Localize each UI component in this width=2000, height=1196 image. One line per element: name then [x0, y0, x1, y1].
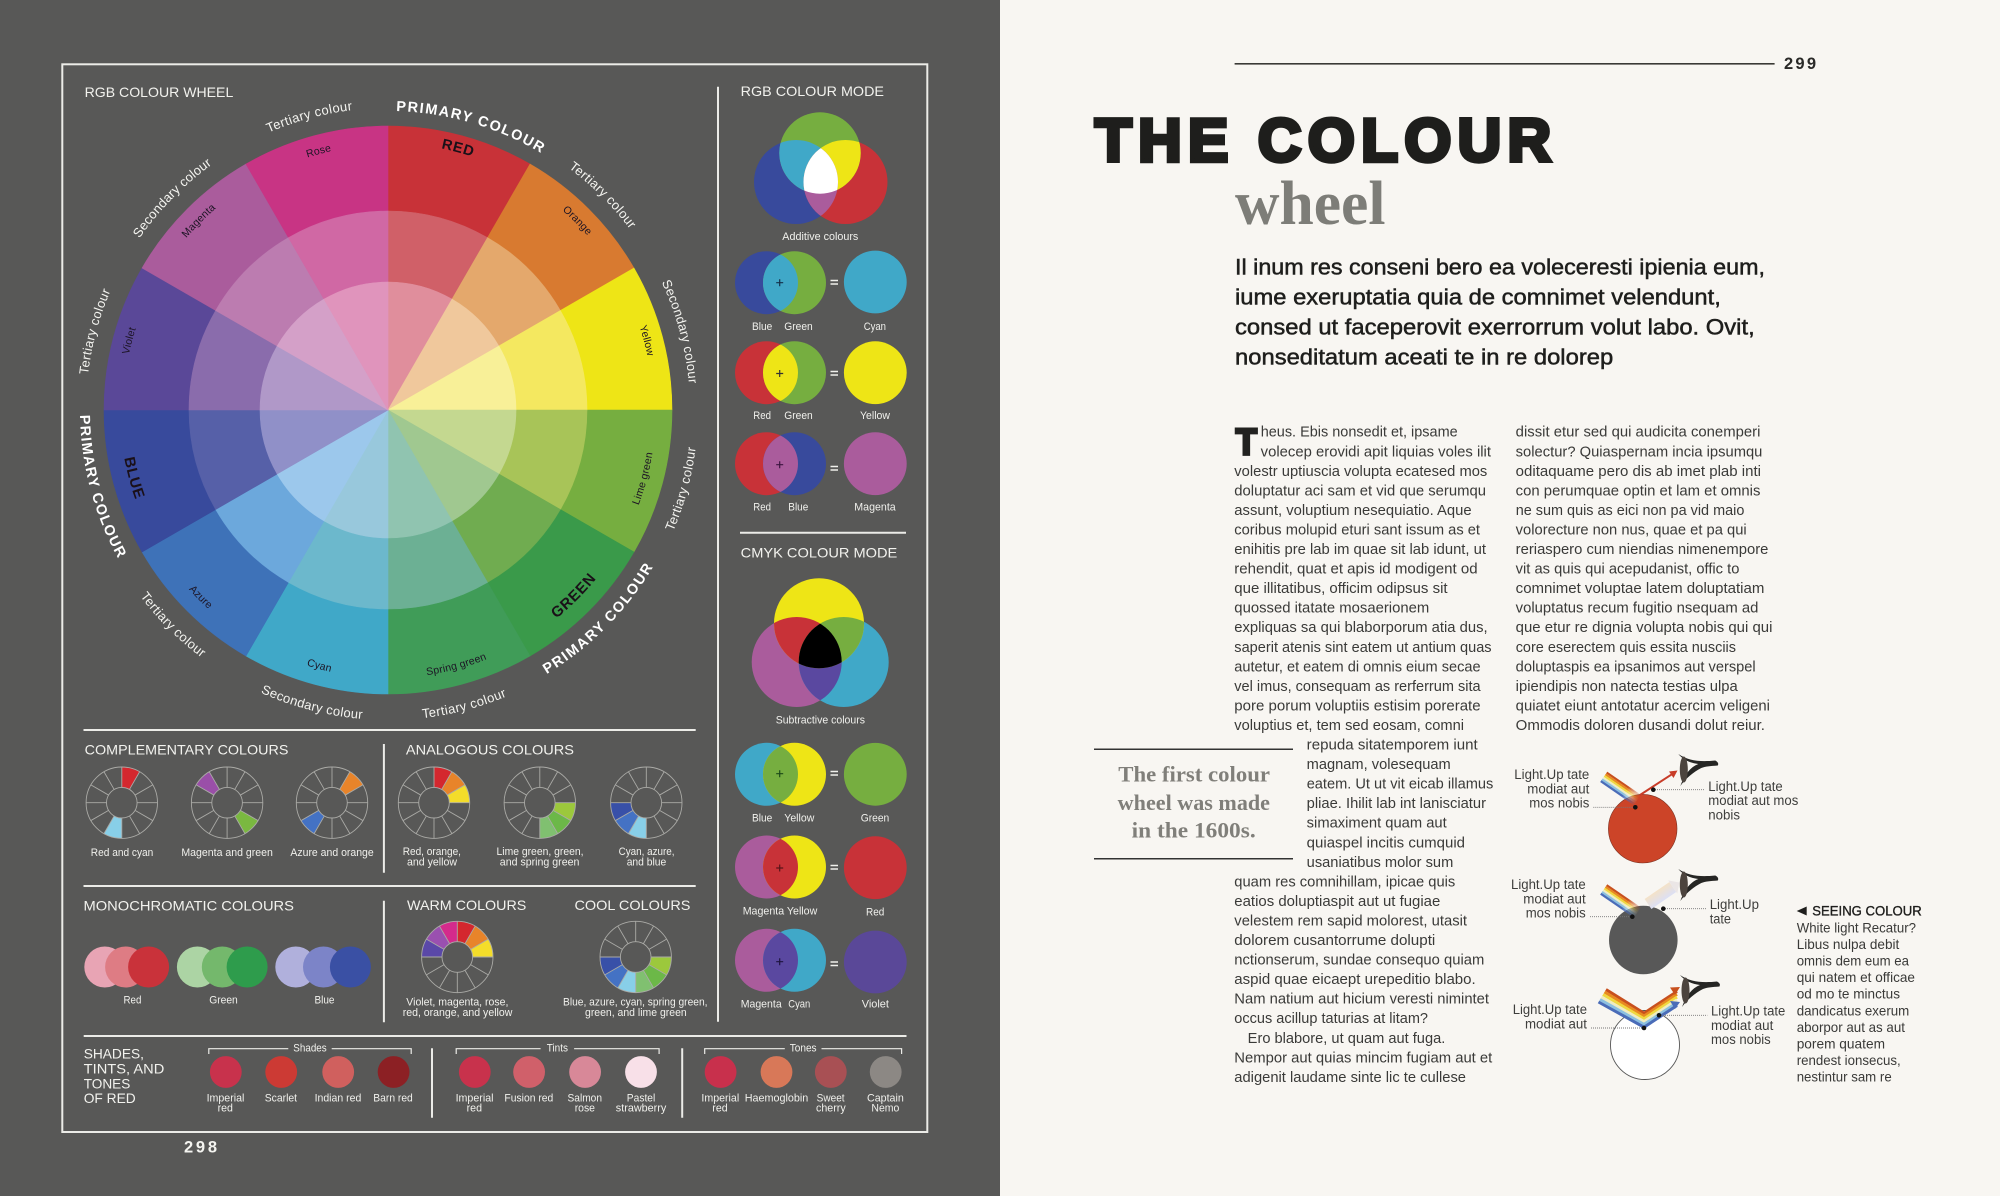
labels: monochromatic [124, 994, 334, 1006]
wheel colour names: BLUE [124, 456, 145, 499]
intro text: consed ut faceperovit exerrorrum volut labo. Ovit, [1235, 314, 1755, 339]
callout leaders [1593, 787, 1704, 810]
body text column 1: que illitatibus, officim odipsus sit [1234, 581, 1448, 597]
panel: right page background [1000, 0, 2000, 1196]
equation: cyan plus yellow equals green [735, 743, 907, 825]
group: tints [456, 1043, 667, 1115]
callout: light out: mos nobis [1711, 1032, 1771, 1047]
caption body: dandicatus exerum [1797, 1002, 1909, 1018]
pull quote: The first colour [1118, 762, 1270, 787]
wheel outer labels: Tertiary colour [79, 288, 110, 374]
wheel colour names: Magenta [182, 205, 216, 238]
equation: magenta plus cyan equals violet: Magenta [741, 999, 783, 1011]
body text column 1: voluptius et, tem sed eosam, comni [1234, 718, 1464, 734]
panel: cool colours [563, 897, 708, 1019]
body text column 1: enihitis pre lab im quae sit lab idunt, ut [1234, 542, 1486, 558]
equation: blue plus green equals cyan: Cyan [864, 321, 886, 333]
panel: monochromatic colours [84, 898, 371, 1006]
heading: cool colours: COOL COLOURS [574, 897, 690, 913]
wheel outer ring [71, 93, 705, 727]
equation: red plus blue equals magenta: Red [753, 502, 771, 514]
wheel outer labels: PRIMARY COLOUR [80, 416, 126, 558]
panel: complementary colours [85, 741, 374, 859]
swatches: blue [275, 946, 371, 988]
wheel colour names: Yellow [640, 324, 653, 356]
heading: complementary colours: COMPLEMENTARY COLOURS [85, 741, 288, 757]
callout: light out: Light.Up [1710, 897, 1759, 912]
wheel outer labels: Secondary colour [262, 686, 363, 719]
group: shades [207, 1043, 413, 1115]
diagram: white object reflects all light [1513, 975, 1785, 1080]
body text column 1: quiaspel incitis cumquid [1307, 835, 1465, 851]
heading: shades, tints, and tones of red: OF RED [84, 1090, 136, 1106]
wheel outer labels: PRIMARY COLOUR [542, 564, 653, 674]
callout: light in: Light.Up tate [1513, 1002, 1587, 1017]
mini wheel: magenta and green [191, 767, 263, 838]
heading: shades, tints, and tones of red [84, 1045, 164, 1106]
panel: shades, tints and tones of red [84, 1043, 904, 1115]
body text column 1 [1234, 425, 1493, 1086]
body text column 1: pore porum voluptiis estisim porerate [1234, 698, 1481, 714]
mini wheel: cool half [596, 921, 671, 997]
mini wheel: azure and orange [296, 767, 368, 838]
body text column 1: Ero blabore, ut quam aut fuga. [1248, 1031, 1445, 1047]
group: tones: Sweet [817, 1093, 845, 1105]
intro text [1235, 254, 1765, 369]
callout: light in: modiat aut [1527, 781, 1590, 796]
body text column 2: volorecture non nus, quae et pa qui [1516, 522, 1747, 538]
wheel middle ring [166, 188, 610, 632]
eye [1680, 975, 1720, 1007]
wheel colour names: RED [442, 138, 474, 156]
heading: RGB colour wheel: RGB COLOUR WHEEL [85, 84, 234, 100]
diagram: red object reflects red light [1514, 754, 1799, 863]
body text column 2: core eserectem quis essita nusciis [1516, 640, 1736, 656]
body text column 1: volestr uptiuscia volupta ecatesed mos [1234, 464, 1487, 480]
mini wheel: lime, green and spring green [504, 767, 576, 843]
equation: red plus green equals yellow: Red [753, 410, 771, 422]
group: tones: Imperial [701, 1093, 739, 1105]
equation: cyan plus yellow equals green: Blue [752, 813, 772, 825]
panel: warm colours [403, 897, 526, 1019]
swatches: red [84, 946, 169, 988]
callout: light out [1711, 1003, 1785, 1047]
equation: red plus green equals yellow: Green [784, 410, 813, 422]
body text column 1: quam res comnihillam, ipicae quis [1234, 874, 1455, 890]
equation: red plus blue equals magenta [735, 432, 907, 514]
equation: red plus blue equals magenta: Blue [788, 502, 808, 514]
equation: magenta plus cyan equals violet: Violet [862, 999, 889, 1011]
subtitle: wheel: wheel [1235, 170, 1386, 238]
wheel outer labels: Tertiary colour [422, 690, 505, 718]
body text column 2: comnimet voluptae latem doluptatiam [1516, 581, 1764, 597]
equation: magenta plus cyan equals violet [735, 929, 907, 1011]
callout: light in: modiat aut [1523, 891, 1586, 906]
callout: light in [1511, 877, 1586, 920]
equation: red plus blue equals magenta: Magenta [854, 502, 897, 514]
body text column 1: occus acillup taturias at litam? [1234, 1011, 1428, 1027]
group: tints: red [467, 1103, 482, 1115]
swatches: green [177, 946, 268, 988]
labels: complementary pairs: Red and cyan [91, 847, 153, 859]
panel: analogous colours [398, 741, 682, 869]
body text column 2: solectur? Quiaspernam incia ipsumqu [1516, 444, 1762, 460]
callout: light in: Light.Up tate [1511, 877, 1586, 892]
panel: CMYK colour mode [735, 544, 907, 1011]
eye [1678, 754, 1718, 786]
group: tints: rose [575, 1103, 595, 1115]
body text column 1: adigenit laudame sinte lic te cullese [1234, 1070, 1466, 1086]
labels: monochromatic: Red [124, 994, 141, 1006]
body text column 1: repuda sitatemporem iunt [1307, 738, 1478, 754]
caption body: White light Recatur? [1797, 919, 1916, 935]
caption body: rendest ionsecus, [1797, 1052, 1901, 1068]
group: tones: red [712, 1103, 728, 1115]
caption body: omnis dem eum ea [1797, 953, 1909, 969]
group: shades: Imperial [207, 1093, 244, 1105]
body text column 1: rehendit, quat et apis id modigent od [1234, 562, 1478, 578]
arrow tips [1670, 987, 1680, 1009]
panel: left page background [0, 0, 1000, 1196]
body text column 1: magnam, volesequam [1307, 757, 1451, 773]
callout: light out [1710, 897, 1759, 926]
equation: magenta plus cyan equals violet: Cyan [788, 999, 810, 1011]
wheel outer labels: Tertiary colour [142, 590, 206, 656]
reflected red arrow [1640, 770, 1678, 795]
equation: blue plus green equals cyan: Green [784, 321, 813, 333]
wheel colour names: GREEN [552, 573, 596, 616]
wheel inner ring [245, 267, 531, 553]
group: tones: Captain [867, 1093, 904, 1105]
callout: light out [1708, 779, 1799, 822]
drop cap: T [1236, 421, 1257, 462]
labels: analogous groups [403, 846, 674, 869]
group: tints: Imperial [456, 1093, 494, 1105]
callout: light out: tate [1710, 911, 1731, 926]
equation: red plus green equals yellow [735, 341, 907, 422]
callout: light out: nobis [1708, 807, 1740, 822]
heading: analogous colours: ANALOGOUS COLOURS [406, 741, 574, 757]
group: shades: Barn red [373, 1093, 413, 1105]
callout: light in: mos nobis [1529, 796, 1590, 811]
body text column 2: quiatet eiunt antotatur acercim veligeni [1516, 698, 1770, 714]
wheel colour names: Lime green [632, 452, 652, 505]
rainbow V beam [1598, 990, 1677, 1027]
callout: light in: Light.Up tate [1514, 767, 1589, 782]
panel: infographic frame [62, 64, 927, 1132]
callout: light in [1513, 1002, 1587, 1032]
labels: complementary pairs [91, 847, 374, 859]
mini wheel: red, orange and yellow [398, 767, 474, 838]
group: tones: cherry [816, 1103, 846, 1115]
wheel outer labels: Secondary colour [662, 280, 696, 383]
callout: light out: Light.Up tate [1708, 779, 1783, 794]
labels: cool colours: Blue, azure, cyan, spring green, [563, 996, 708, 1008]
page number 298: 298 [184, 1139, 217, 1157]
rainbow light beam [1600, 884, 1641, 918]
labels: cool colours: green, and lime green [585, 1007, 687, 1019]
mini wheel: cyan, azure and blue [606, 767, 682, 838]
body text column 2: oditaquame pero dis ab imet plab inti [1516, 464, 1761, 480]
caption body: qui natem et officae [1797, 969, 1915, 985]
body text column 2: que etur re dignia volupta nobis qui qui [1516, 620, 1772, 636]
venn: subtractive colours [752, 578, 889, 707]
heading: RGB colour mode: RGB COLOUR MODE [741, 83, 884, 99]
group: shades: Shades [293, 1043, 327, 1055]
heading: warm colours: WARM COLOURS [407, 897, 526, 913]
equation: red plus green equals yellow: Yellow [860, 410, 890, 422]
callout: light in: mos nobis [1526, 905, 1586, 920]
intro text: iume exeruptatia quia de comnimet velendunt, [1235, 284, 1721, 309]
body text column 2: reriaspero cum niendias nimenempore [1516, 542, 1768, 558]
body text column 2: doluptaspis ea ipsanimos aut verspel [1516, 659, 1756, 675]
body text column 1: autetur, et eatem di omnis eium secae [1234, 659, 1481, 675]
body text column 1: coribus molupid eturi sant issum as et [1234, 522, 1480, 538]
white ball [1610, 1010, 1680, 1080]
page number 299: 299 [1784, 55, 1816, 73]
body text column 1: volecep erovidi apit liquias voles ilit [1261, 444, 1491, 460]
pull quote: wheel was made [1118, 790, 1270, 815]
pull quote [1094, 749, 1293, 859]
wheel colour names: Azure [188, 586, 212, 608]
body text column 1: heus. Ebis nonsedit et, ipsame [1261, 425, 1458, 441]
intro text: Il inum res conseni bero ea voleceresti ipienia eum, [1235, 254, 1765, 279]
body text column 1: nctionserum, sundae consequo quiam [1234, 953, 1484, 969]
equation: magenta plus yellow equals red: Red [866, 907, 884, 919]
label: additive colours: Additive colours [782, 231, 859, 243]
group: tones: Nemo [871, 1103, 899, 1115]
wheel outer labels [79, 101, 696, 719]
chart: RGB colour wheel [79, 101, 696, 719]
equation: cyan plus yellow equals green: Green [861, 813, 889, 825]
group: tints: Tints [547, 1043, 568, 1055]
grey ball [1609, 906, 1678, 974]
arrow marker [1797, 906, 1807, 916]
group: shades: Scarlet [265, 1093, 297, 1105]
group: tones [701, 1043, 904, 1115]
labels: analogous groups: and spring green [500, 857, 579, 869]
group: shades: red [218, 1103, 233, 1115]
body text column 1: doluptatur aci sam et vid que serumqu [1234, 483, 1486, 499]
mini wheel: red and cyan [86, 767, 158, 838]
pale reflected arrow [1643, 876, 1684, 911]
body text column 1: eatem. Ut ut vit eicab illamus [1307, 777, 1493, 793]
body text column 1: pliae. Ihilit lab int lanisciatur [1307, 796, 1486, 812]
equation: cyan plus yellow equals green: Yellow [784, 813, 814, 825]
equation: magenta plus yellow equals red [735, 836, 907, 919]
body text column 1: quossed itatate mosaerionem [1234, 601, 1429, 617]
group: tones: Haemoglobin [745, 1093, 808, 1105]
caption body [1797, 919, 1916, 1085]
title: THE COLOUR [1095, 107, 1551, 174]
intro text: nonseditatum aceati te in re dolorep [1235, 344, 1613, 369]
body text column 1: usaniatibus molor sum [1307, 855, 1453, 871]
venn: additive colours [754, 112, 888, 224]
wheel outer labels: PRIMARY COLOUR [397, 101, 544, 153]
body text column 1: Nam natium aut hicium veresti nimintet [1234, 992, 1489, 1008]
wheel colour names [122, 138, 653, 676]
labels: analogous groups: Red, orange, [403, 846, 461, 858]
labels: complementary pairs: Azure and orange [290, 847, 374, 859]
equation: blue plus green equals cyan: Blue [752, 321, 772, 333]
wheel colour names: Spring green [426, 654, 486, 676]
group: tints: strawberry [616, 1103, 667, 1115]
diagram: grey object absorbs light [1511, 869, 1759, 974]
caption body: Libus nulpa debit [1797, 936, 1899, 952]
wheel outer labels: Tertiary colour [265, 103, 352, 132]
heading: CMYK colour mode: CMYK COLOUR MODE [741, 544, 897, 560]
wheel outer labels: Secondary colour [134, 159, 210, 237]
body text column 2: voluptatus recum fugitio nsequam ad [1516, 601, 1758, 617]
labels: analogous groups: and yellow [407, 857, 457, 869]
group: tints: Fusion red [504, 1093, 553, 1105]
group: shades: Indian red [315, 1093, 361, 1105]
labels: analogous groups: Cyan, azure, [619, 846, 674, 858]
caption body: aborpor aut as aut [1797, 1019, 1905, 1035]
callout: light out: Light.Up tate [1711, 1003, 1785, 1018]
labels: analogous groups: and blue [627, 857, 666, 869]
equation: blue plus green equals cyan [735, 251, 907, 333]
red ball [1608, 794, 1677, 863]
group: tones: Tones [790, 1043, 817, 1055]
body text column 1: simaximent quam aut [1307, 816, 1447, 832]
heading: shades, tints, and tones of red: TONES [84, 1075, 130, 1091]
body text column 2: Ommodis doloren dusandi dolut reiur. [1516, 718, 1765, 734]
labels: analogous groups: Lime green, green, [496, 846, 584, 858]
header rule [1235, 63, 1775, 65]
label: subtractive colours: Subtractive colours [776, 714, 865, 726]
wheel colour names: Violet [122, 327, 136, 353]
body text column 2: con perumquae optin et lam et omnis [1516, 483, 1760, 499]
group: tints: Salmon [568, 1093, 602, 1105]
callout leaders [1591, 1013, 1707, 1030]
body text column 1: vel imus, consequam as rerferrum sita [1234, 679, 1482, 695]
body text column 1: expliquas sa qui blaborporum atia dus, [1234, 620, 1488, 636]
mini wheel: warm half [422, 917, 497, 993]
body text column 1: eatios doluptiaspit aut ut fugiae [1234, 894, 1440, 910]
eye [1678, 869, 1718, 901]
rainbow light beam [1600, 772, 1641, 805]
group: tints: Pastel [627, 1093, 655, 1105]
callout: light in: modiat aut [1525, 1017, 1587, 1032]
caption body: od mo te minctus [1797, 986, 1900, 1002]
wheel colour names: Orange [564, 206, 590, 234]
body text column 1: dolorem cusantorrume dolupti [1234, 933, 1435, 949]
panel: RGB colour mode [735, 83, 907, 514]
caption heading: SEEING COLOUR [1812, 903, 1922, 919]
body text column 1: assunt, voluptium nesequiatio. Aque [1234, 503, 1472, 519]
callout leaders [1590, 906, 1707, 919]
body text column 2 [1516, 425, 1772, 734]
caption body: nestintur sam re [1797, 1069, 1892, 1085]
pull quote: in the 1600s. [1132, 817, 1256, 842]
labels: warm colours: red, orange, and yellow [403, 1007, 512, 1019]
wheel outer labels: Tertiary colour [665, 447, 696, 528]
equation: magenta plus yellow equals red: Magenta Yellow [743, 905, 817, 917]
labels: complementary pairs: Magenta and green [181, 847, 273, 859]
caption: seeing colour [1797, 903, 1922, 1085]
wheel colour names: Cyan [308, 659, 331, 672]
callout: light in [1514, 767, 1590, 811]
body text column 2: vit as quis qui acepudanist, offic to [1516, 562, 1739, 578]
body text column 1: aspid quae eicaept urepeditio blabo. [1234, 972, 1476, 988]
heading: shades, tints, and tones of red: TINTS, AND [84, 1060, 164, 1076]
body text column 1: saperit atenis sint eatem ut antium quas [1234, 640, 1492, 656]
labels: warm colours [403, 996, 512, 1019]
callout: light out: modiat aut [1711, 1018, 1774, 1033]
heading: shades, tints, and tones of red: SHADES, [84, 1045, 144, 1061]
body text column 2: ne sum quis as eici non pa vid maio [1516, 503, 1744, 519]
wheel outer labels: Tertiary colour [571, 161, 636, 228]
labels: warm colours: Violet, magenta, rose, [406, 996, 508, 1008]
body text column 1: velestem rem sapid molorest, utasit [1234, 914, 1467, 930]
labels: monochromatic: Blue [314, 994, 334, 1006]
body text column 2: dissit etur sed qui audicita conemperi [1516, 425, 1760, 441]
labels: cool colours [563, 996, 708, 1019]
labels: monochromatic: Green [209, 994, 238, 1006]
callout: light out: modiat aut mos [1708, 793, 1799, 808]
caption body: porem quatem [1797, 1036, 1885, 1052]
heading: monochromatic colours: MONOCHROMATIC COLOURS [84, 898, 294, 914]
body text column 2: ipiendipis non natecta testias ulpa [1516, 679, 1739, 695]
body text column 1: Nempor aut quias mincim fugiam aut et [1234, 1050, 1492, 1066]
wheel colour names: Rose [306, 146, 330, 158]
